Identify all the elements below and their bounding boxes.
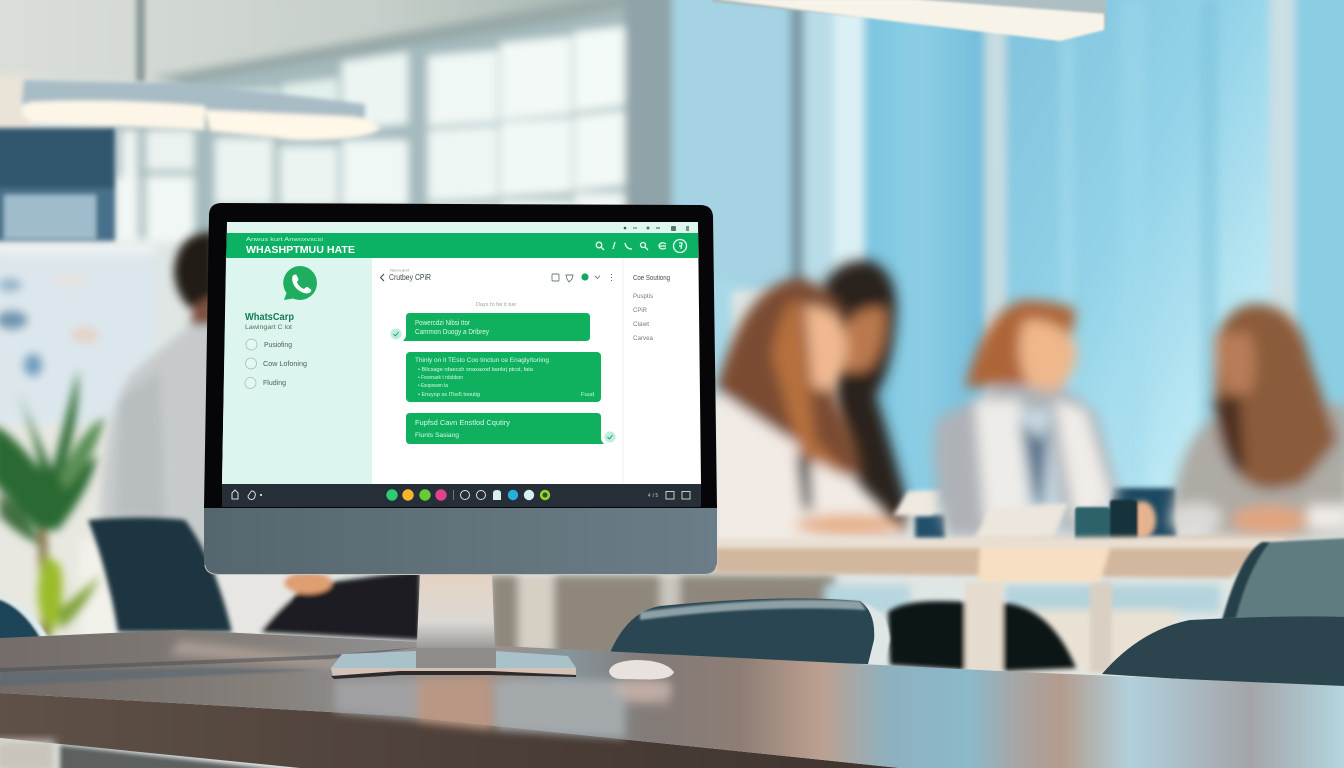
date separator: Days fo far it tue <box>476 302 516 308</box>
ceiling <box>0 0 640 85</box>
left window <box>115 10 630 246</box>
taskbar left icons <box>232 490 262 500</box>
foreground table <box>0 630 1344 768</box>
woman with red hair and grey blazer <box>934 300 1120 537</box>
icon: WhatsApp logo <box>283 266 317 300</box>
header icons <box>596 240 686 252</box>
foreground chair centre <box>607 598 890 664</box>
right info panel <box>622 258 670 484</box>
chat bubble 2 with list: • Esopowen ta <box>418 383 449 389</box>
office chair far left <box>0 595 50 640</box>
table reflections <box>170 640 670 738</box>
chat bubble 1: Cammon Duogy a Dribrey <box>415 329 489 336</box>
right blue windows <box>672 0 794 290</box>
right info panel: Coe Soutiong <box>633 275 670 282</box>
chat toolbar icons <box>552 273 612 282</box>
sidebar heading <box>245 312 294 331</box>
man in dark suit <box>818 260 908 535</box>
header title: WHASHPTMUU HATE <box>246 244 355 256</box>
taskbar app icons <box>386 489 550 501</box>
handheld tablet <box>893 490 945 516</box>
chat bubble 2 with list: • Feornark t rdsbbon <box>418 375 463 381</box>
sidebar heading: Lawingart C lot <box>245 324 292 331</box>
back table top <box>715 535 1290 582</box>
taskbar right status <box>648 492 690 499</box>
monitor bezel <box>204 203 717 508</box>
chat bubble 2 with list: • Ensyop ss ITos5 tooutig <box>418 392 480 398</box>
right chair against back table <box>1222 538 1344 625</box>
small tablet on table <box>972 503 1068 544</box>
sidebar menu list: Cow Lofoning <box>263 361 307 368</box>
dark wall display <box>0 128 115 242</box>
monitor <box>204 203 717 575</box>
coffee mugs <box>1075 500 1156 549</box>
screen base <box>222 222 701 484</box>
stand base <box>331 651 576 668</box>
monitor chin <box>204 508 717 575</box>
right info panel: CPiR <box>633 307 647 314</box>
concrete column <box>625 0 672 290</box>
wireless mouse <box>609 660 674 699</box>
chat header <box>380 268 612 282</box>
chat bubble 2 with list: Fuud <box>581 392 594 398</box>
ceiling lamp, left <box>22 0 380 140</box>
foreground chair right <box>1102 616 1344 690</box>
chat bubble 3: Fupfsd Cavn Enstlod Cqutiry <box>415 418 510 427</box>
woman with long brown hair <box>714 278 910 544</box>
sidebar menu list: Fluding <box>263 380 286 387</box>
stand neck <box>415 575 495 660</box>
right info panel: Carvea <box>633 335 653 342</box>
sidebar menu list: Pusiofing <box>264 342 292 349</box>
taskbar <box>222 484 701 507</box>
whiteboard <box>0 244 155 427</box>
taskbar right status: 4 :/ 5 <box>648 493 658 499</box>
chat bubble 1: Powercdzi Nibsi ttor <box>415 320 471 327</box>
sidebar heading: WhatsCarp <box>245 312 294 323</box>
left sidebar <box>222 258 372 484</box>
chat bubble 1 <box>390 313 590 341</box>
green app header <box>226 233 698 258</box>
ceiling lamp, top right <box>712 0 1106 41</box>
chat header: Narovarst <box>390 268 409 272</box>
monitor stand <box>331 575 576 679</box>
chat bubble 2 with list <box>406 352 601 402</box>
back table and underneath area <box>490 535 1290 672</box>
people group at back table <box>714 260 1344 549</box>
right info panel: Clawt <box>633 321 649 328</box>
table top surface <box>0 630 1344 768</box>
dark band behind people <box>915 488 1176 540</box>
chat bubble 2 with list: Thinly on it TEsto Coo tinctun ce Enagly/toriing <box>415 357 549 364</box>
screen <box>222 222 701 507</box>
sidebar menu list <box>245 339 307 388</box>
right info panel: Pusptis <box>633 293 654 300</box>
header title: Anwus kurt Anwoxvxcsi <box>246 237 323 243</box>
window title strip <box>227 222 698 233</box>
lower left wall <box>0 425 120 640</box>
potted plant <box>0 370 105 640</box>
chat bubble 3 <box>406 413 616 444</box>
person seen from behind, left <box>100 232 420 640</box>
header title <box>246 237 355 256</box>
table front edge <box>0 693 900 768</box>
chat bubble 3: Flunts Sasiang <box>415 432 459 439</box>
office chair behind monitor <box>88 518 232 632</box>
chat bubble 2 with list: • Bilcsage rdaecsh snaxaxod bankrj ptcst, fata <box>418 367 534 373</box>
chat header: Crutbey CPiR <box>389 273 431 282</box>
woman at right with long hair <box>1170 304 1344 538</box>
